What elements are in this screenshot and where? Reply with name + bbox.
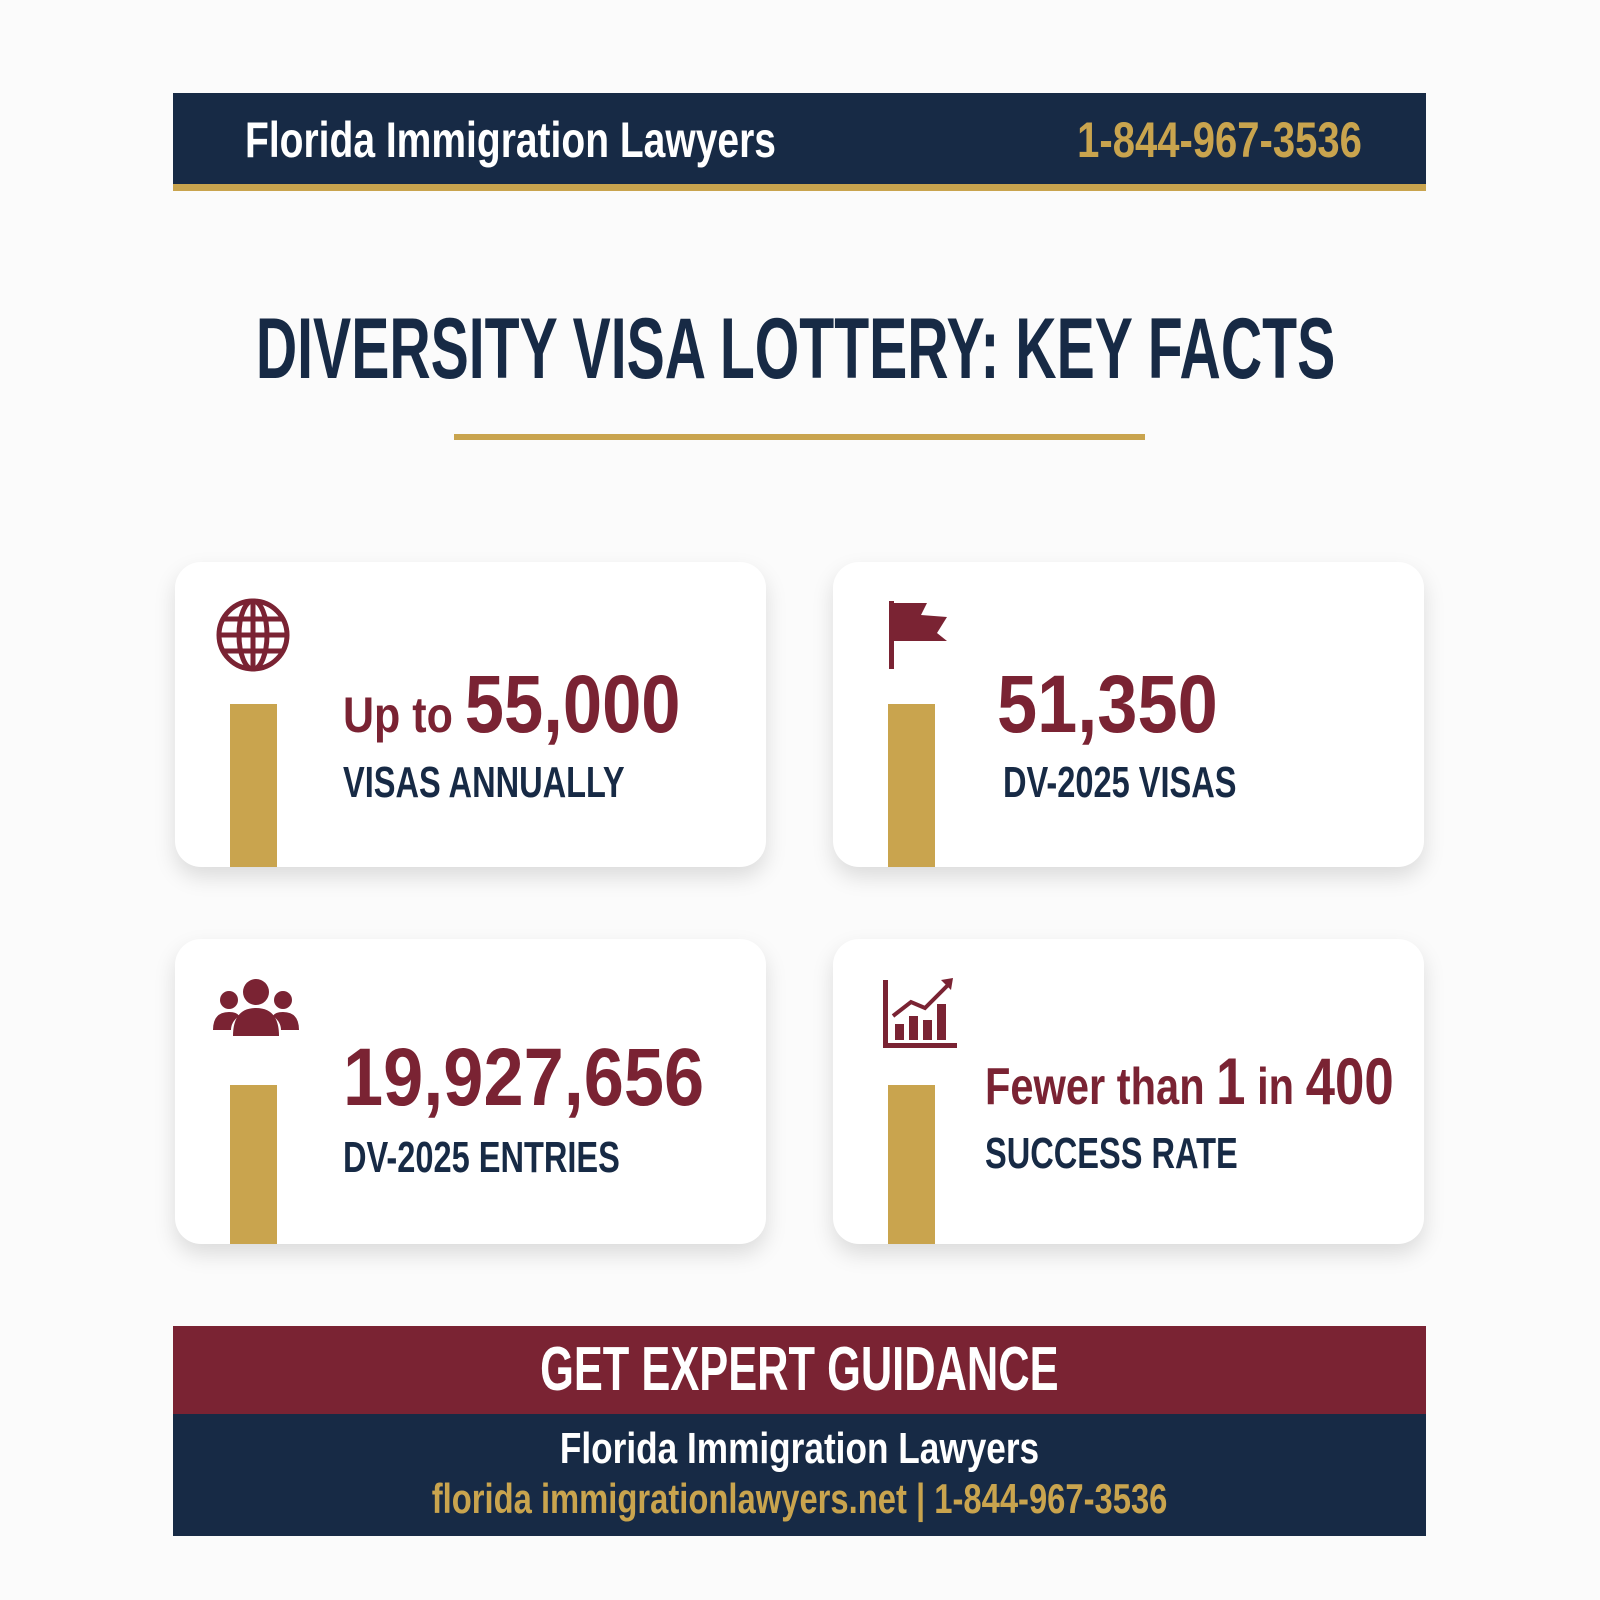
stat text: 51,350 xyxy=(997,659,1218,750)
contact block: Florida Immigration Lawyers xyxy=(560,1424,1039,1473)
stat text: DV-2025 VISAS xyxy=(1003,758,1236,807)
stat text xyxy=(997,659,1236,807)
stat text: VISAS ANNUALLY xyxy=(343,758,625,807)
header phone: 1-844-967-3536 xyxy=(1077,112,1362,168)
card: entries xyxy=(175,939,766,1244)
stat text xyxy=(343,659,681,807)
title underline xyxy=(454,434,1145,440)
stat text xyxy=(985,1044,1394,1178)
stat text: Fewer than 1 in 400 xyxy=(985,1044,1394,1118)
stat text: 19,927,656 xyxy=(343,1032,704,1123)
CTA heading: GET EXPERT GUIDANCE xyxy=(540,1335,1059,1404)
contact block: florida immigrationlawyers.net | 1-844-967-3536 xyxy=(432,1475,1167,1522)
icon: globe xyxy=(216,598,290,672)
stat text: DV-2025 ENTRIES xyxy=(343,1133,620,1182)
stat text: SUCCESS RATE xyxy=(985,1129,1238,1178)
icon: chart xyxy=(883,978,957,1048)
CTA heading xyxy=(173,1326,1426,1414)
card: success rate xyxy=(833,939,1424,1244)
header bar xyxy=(173,93,1426,191)
footer CTA xyxy=(173,1326,1426,1536)
title: DIVERSITY VISA LOTTERY: KEY FACTS xyxy=(256,301,1335,397)
header firm name: Florida Immigration Lawyers xyxy=(245,112,776,168)
stat text: Up to 55,000 xyxy=(343,659,681,750)
contact block xyxy=(173,1414,1426,1536)
card: DV-2025 visas xyxy=(833,562,1424,867)
stat text xyxy=(343,1032,704,1182)
icon: people xyxy=(213,979,299,1036)
card: visas annually xyxy=(175,562,766,867)
icon: flag xyxy=(889,601,947,669)
